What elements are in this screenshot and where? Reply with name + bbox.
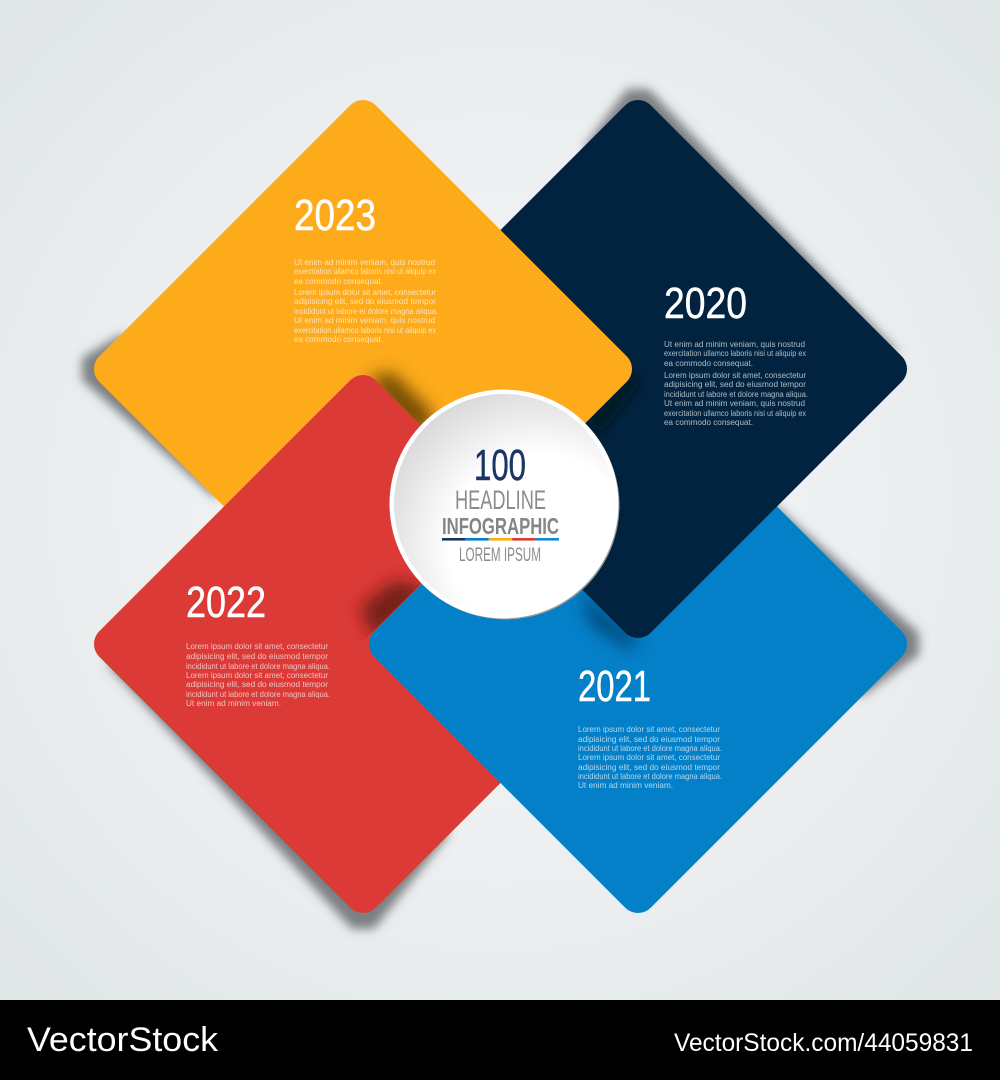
text block 2021: adipisicing elit, sed do eiusmod tempor — [578, 763, 720, 772]
central circle — [390, 390, 620, 620]
drop shadows on background — [82, 89, 919, 929]
circle white ring — [390, 390, 618, 618]
circle rim shadow — [392, 392, 620, 620]
panel: 2020 navy — [500, 100, 907, 638]
text block 2020: adipisicing elit, sed do eiusmod tempor — [664, 380, 806, 389]
text block 2023 — [294, 258, 438, 344]
text block 2022 — [186, 642, 330, 708]
text block 2022: Ut enim ad minim veniam. — [186, 699, 281, 708]
number 100: 100 — [474, 441, 526, 490]
shadow from red on orange — [368, 372, 432, 440]
text block 2022: Lorem ipsum dolor sit amet, consectetur — [186, 642, 328, 651]
headline: HEADLINE — [455, 485, 546, 515]
text block 2021: adipisicing elit, sed do eiusmod tempor — [578, 735, 720, 744]
text block 2021: incididunt ut labore et dolore magna aliqua. — [578, 744, 722, 753]
text block 2023: Ut enim ad minim veniam, quis nostrud — [294, 316, 435, 325]
footer url: VectorStock.com/44059831 — [674, 1029, 973, 1057]
text block 2020: incididunt ut labore et dolore magna aliqua. — [664, 390, 808, 399]
text block 2020: Ut enim ad minim veniam, quis nostrud — [664, 399, 805, 408]
year 2023: 2023 — [294, 191, 376, 240]
year 2022: 2022 — [186, 578, 266, 627]
text block 2022: Lorem ipsum dolor sit amet, consectetur — [186, 671, 328, 680]
text block 2023: incididunt ut labore et dolore magna aliqua. — [294, 307, 438, 316]
shadow from navy on blue — [580, 590, 640, 650]
text block 2022: adipisicing elit, sed do eiusmod tempor — [186, 652, 328, 661]
panel: 2023 orange — [87, 93, 639, 645]
footer logo: VectorStock — [27, 1021, 219, 1059]
text block 2023: exercitation ullamco laboris nisi ut aliquip ex — [294, 326, 436, 335]
text block 2020: exercitation ullamco laboris nisi ut aliquip ex — [664, 409, 806, 418]
text block 2020: exercitation ullamco laboris nisi ut aliquip ex — [664, 349, 806, 358]
circle inner disc — [394, 394, 614, 614]
text block 2020: Ut enim ad minim veniam, quis nostrud — [664, 340, 805, 349]
text block 2023: Lorem ipsum dolor sit amet, consectetur — [294, 288, 436, 297]
colour bar — [442, 538, 559, 541]
text block 2021: incididunt ut labore et dolore magna aliqua. — [578, 772, 722, 781]
text block 2023: Ut enim ad minim veniam, quis nostrud — [294, 258, 435, 267]
text block 2020: ea commodo consequat. — [664, 418, 753, 427]
text block 2021: Ut enim ad minim veniam. — [578, 781, 673, 790]
shadow from orange on navy — [585, 372, 640, 435]
text block 2021: Lorem ipsum dolor sit amet, consectetur — [578, 725, 720, 734]
shadow from blue on red — [360, 580, 430, 640]
text block 2023: ea commodo consequat. — [294, 335, 383, 344]
text block 2021 — [578, 725, 722, 790]
text block 2023: exercitation ullamco laboris nisi ut aliquip ex — [294, 267, 436, 276]
footer bar — [0, 1000, 1000, 1080]
text block 2022: incididunt ut labore et dolore magna aliqua. — [186, 690, 330, 699]
text block 2020: Lorem ipsum dolor sit amet, consectetur — [664, 371, 806, 380]
year 2021: 2021 — [578, 662, 651, 711]
text block 2022: adipisicing elit, sed do eiusmod tempor — [186, 680, 328, 689]
text block 2021: Lorem ipsum dolor sit amet, consectetur — [578, 753, 720, 762]
text block 2023: ea commodo consequat. — [294, 277, 383, 286]
panel: 2021 blue — [369, 506, 907, 913]
text block 2023: adipisicing elit, sed do eiusmod tempor — [294, 297, 436, 306]
lorem ipsum label: LOREM IPSUM — [459, 544, 541, 566]
text block 2020 — [664, 340, 808, 427]
year 2020: 2020 — [664, 279, 747, 328]
text block 2022: incididunt ut labore et dolore magna aliqua. — [186, 662, 330, 671]
panel: 2022 red — [87, 368, 639, 920]
panel: red overlap above orange — [222, 375, 422, 638]
infographic label: INFOGRAPHIC — [442, 513, 559, 539]
text block 2020: ea commodo consequat. — [664, 359, 753, 368]
